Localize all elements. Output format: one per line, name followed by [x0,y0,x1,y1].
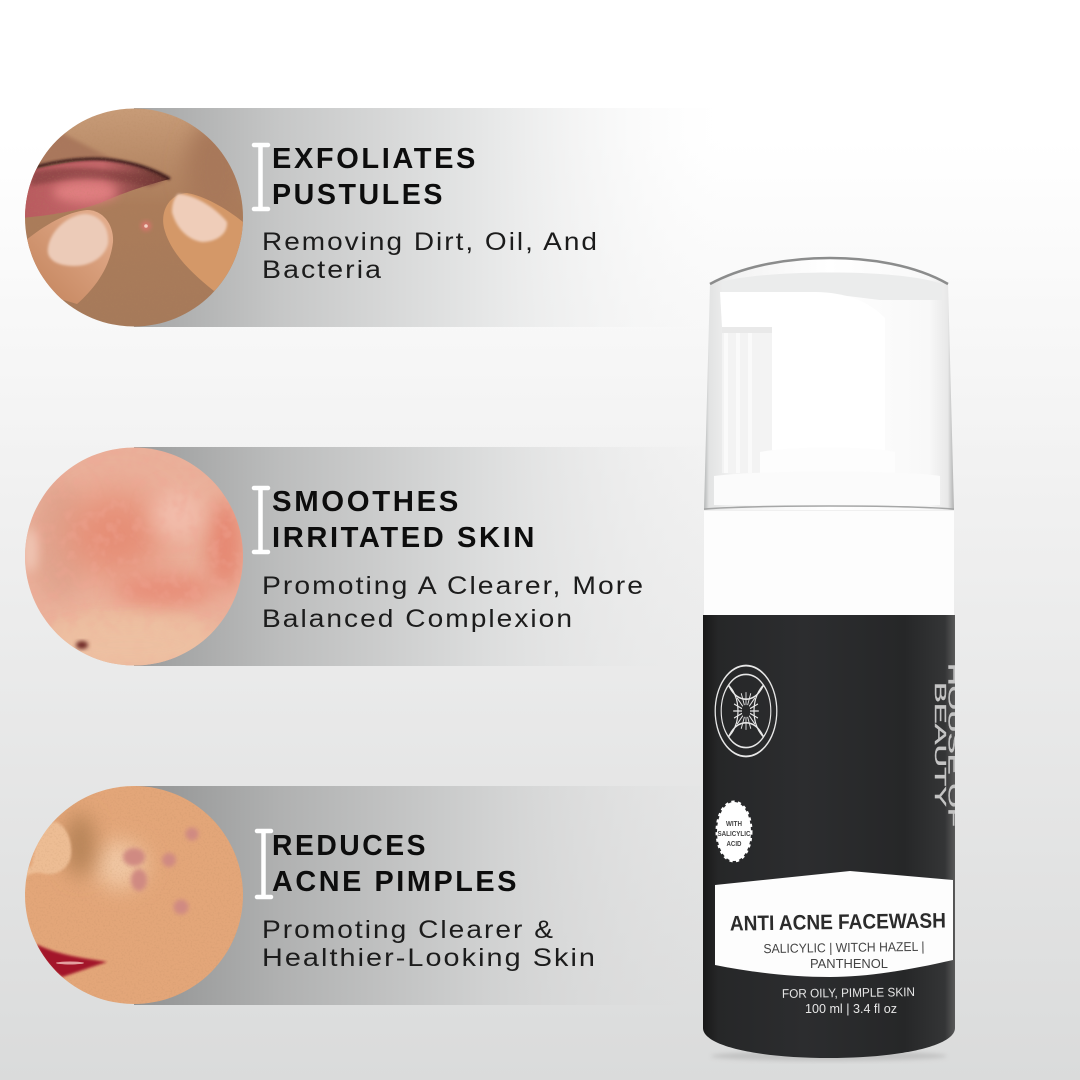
description [262,228,599,284]
white collar [704,511,954,616]
description: Balanced Complexion [262,605,574,633]
bottle shadow [711,1051,947,1061]
label text [730,909,946,971]
photo: pimple near lip [20,108,250,327]
band 3 [134,786,720,1005]
description: Removing Dirt, Oil, And [262,228,599,256]
panel: reduces acne pimples [25,786,594,1005]
label text: SALICYLIC | WITCH HAZEL | [763,939,925,956]
badge: with salicylic acid [717,802,751,861]
panel: smoothes irritated skin [25,447,642,666]
label text: ANTI ACNE FACEWASH [730,909,946,936]
size text: 100 ml | 3.4 fl oz [805,1002,897,1016]
panel: exfoliates pustules [25,108,602,327]
size text [782,985,915,1016]
heading [272,143,478,211]
heading [272,486,537,554]
description: Promoting Clearer & [262,916,555,944]
band 2 [134,447,720,666]
label text: PANTHENOL [810,956,888,971]
heading: PUSTULES [272,179,445,211]
photo: cheek with acne [20,786,243,1005]
description: Bacteria [262,256,383,284]
brand name: BEAUTY [931,682,948,808]
white label [715,871,953,977]
black body [703,615,955,1058]
description: Healthier-Looking Skin [262,944,597,972]
description [262,572,645,633]
clear cap [704,257,954,510]
badge: with salicylic acid: WITH [726,821,742,828]
bracket [257,831,271,897]
heading: REDUCES [272,830,428,862]
description: Promoting A Clearer, More [262,572,645,600]
heading: SMOOTHES [272,486,461,518]
band 1 [134,108,720,327]
size text: FOR OILY, PIMPLE SKIN [782,985,915,1001]
photo: red irritated skin [22,447,243,672]
heading: ACNE PIMPLES [272,866,519,898]
logo [714,664,778,758]
badge: with salicylic acid: SALICYLIC [718,831,750,838]
bracket [254,145,268,209]
description [262,916,597,972]
brand name [934,665,955,826]
bracket [254,488,268,552]
heading: EXFOLIATES [272,143,478,175]
brand name: HOUSE OF [944,663,962,827]
heading: IRRITATED SKIN [272,522,537,554]
badge: with salicylic acid: ACID [726,841,742,848]
product bottle [696,257,962,1061]
heading [272,830,519,898]
